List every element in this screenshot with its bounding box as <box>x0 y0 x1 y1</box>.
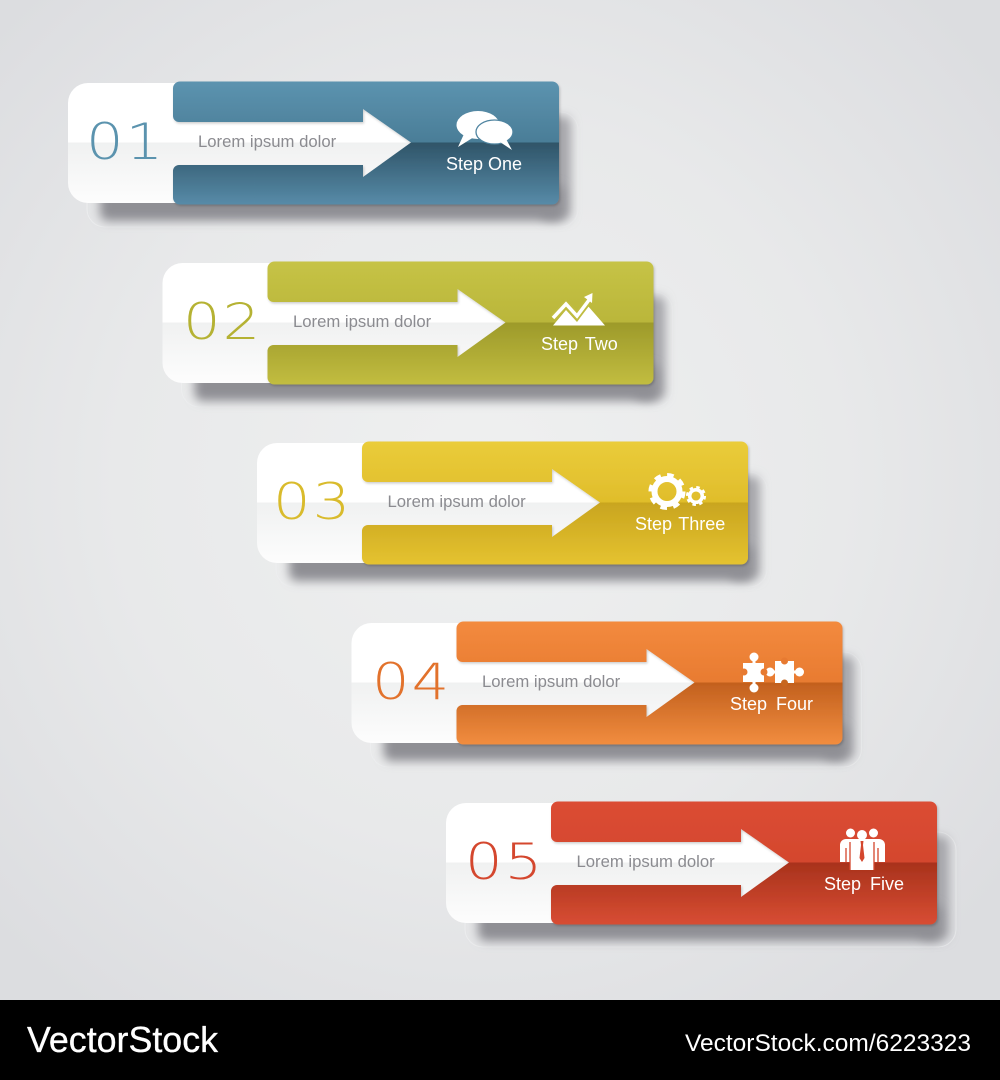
watermark logo text: VectorStock <box>27 1020 218 1060</box>
step 2 coloured panel <box>268 262 654 384</box>
step 1 title: Step One <box>446 154 522 174</box>
step 3 coloured panel <box>362 442 748 564</box>
step 4 number: 04 <box>372 652 451 711</box>
icon: business people <box>840 828 885 870</box>
icon: puzzle pieces <box>740 652 804 692</box>
step 4 arrow label: Lorem ipsum dolor <box>482 672 621 691</box>
step 3 drop shadow <box>276 472 767 587</box>
step 5 title: Step Five <box>824 874 904 894</box>
step 1 coloured panel <box>173 82 559 204</box>
step 5 arrow label: Lorem ipsum dolor <box>576 852 715 871</box>
watermark bar <box>0 1000 1000 1080</box>
step 1 number: 01 <box>86 112 165 171</box>
step 1 arrow label: Lorem ipsum dolor <box>198 132 337 151</box>
step 4 drop shadow <box>370 652 862 767</box>
step 2 title: Step Two <box>541 334 618 354</box>
step 3 arrow label: Lorem ipsum dolor <box>388 492 526 511</box>
step 4 card <box>352 622 862 767</box>
step 3 white tab and arrow <box>257 443 600 563</box>
step 3 number: 03 <box>273 472 352 531</box>
step 2 arrow label: Lorem ipsum dolor <box>293 312 432 331</box>
icon: gears <box>651 475 705 508</box>
step 3 title: Step Three <box>635 514 725 534</box>
step 5 white tab and arrow <box>446 803 789 923</box>
step 4 title: Step Four <box>730 694 813 714</box>
step 2 white tab and arrow <box>162 263 506 383</box>
step 2 number: 02 <box>183 292 262 351</box>
step 4 coloured panel <box>456 622 842 744</box>
step 1 card <box>68 82 578 227</box>
step 2 drop shadow <box>182 292 672 407</box>
icon: mountain chart <box>553 293 605 326</box>
step 4 white tab and arrow <box>352 623 694 743</box>
step 5 drop shadow <box>465 832 956 947</box>
icon: speech bubbles <box>456 111 513 150</box>
step 5 coloured panel <box>551 802 937 924</box>
step 1 white tab and arrow <box>68 83 411 203</box>
step 3 card <box>257 442 767 587</box>
watermark url: VectorStock.com/6223323 <box>685 1030 971 1057</box>
step 5 number: 05 <box>465 832 544 891</box>
step 1 drop shadow <box>87 112 578 227</box>
step 5 card <box>446 802 956 947</box>
step 2 card <box>162 262 672 407</box>
